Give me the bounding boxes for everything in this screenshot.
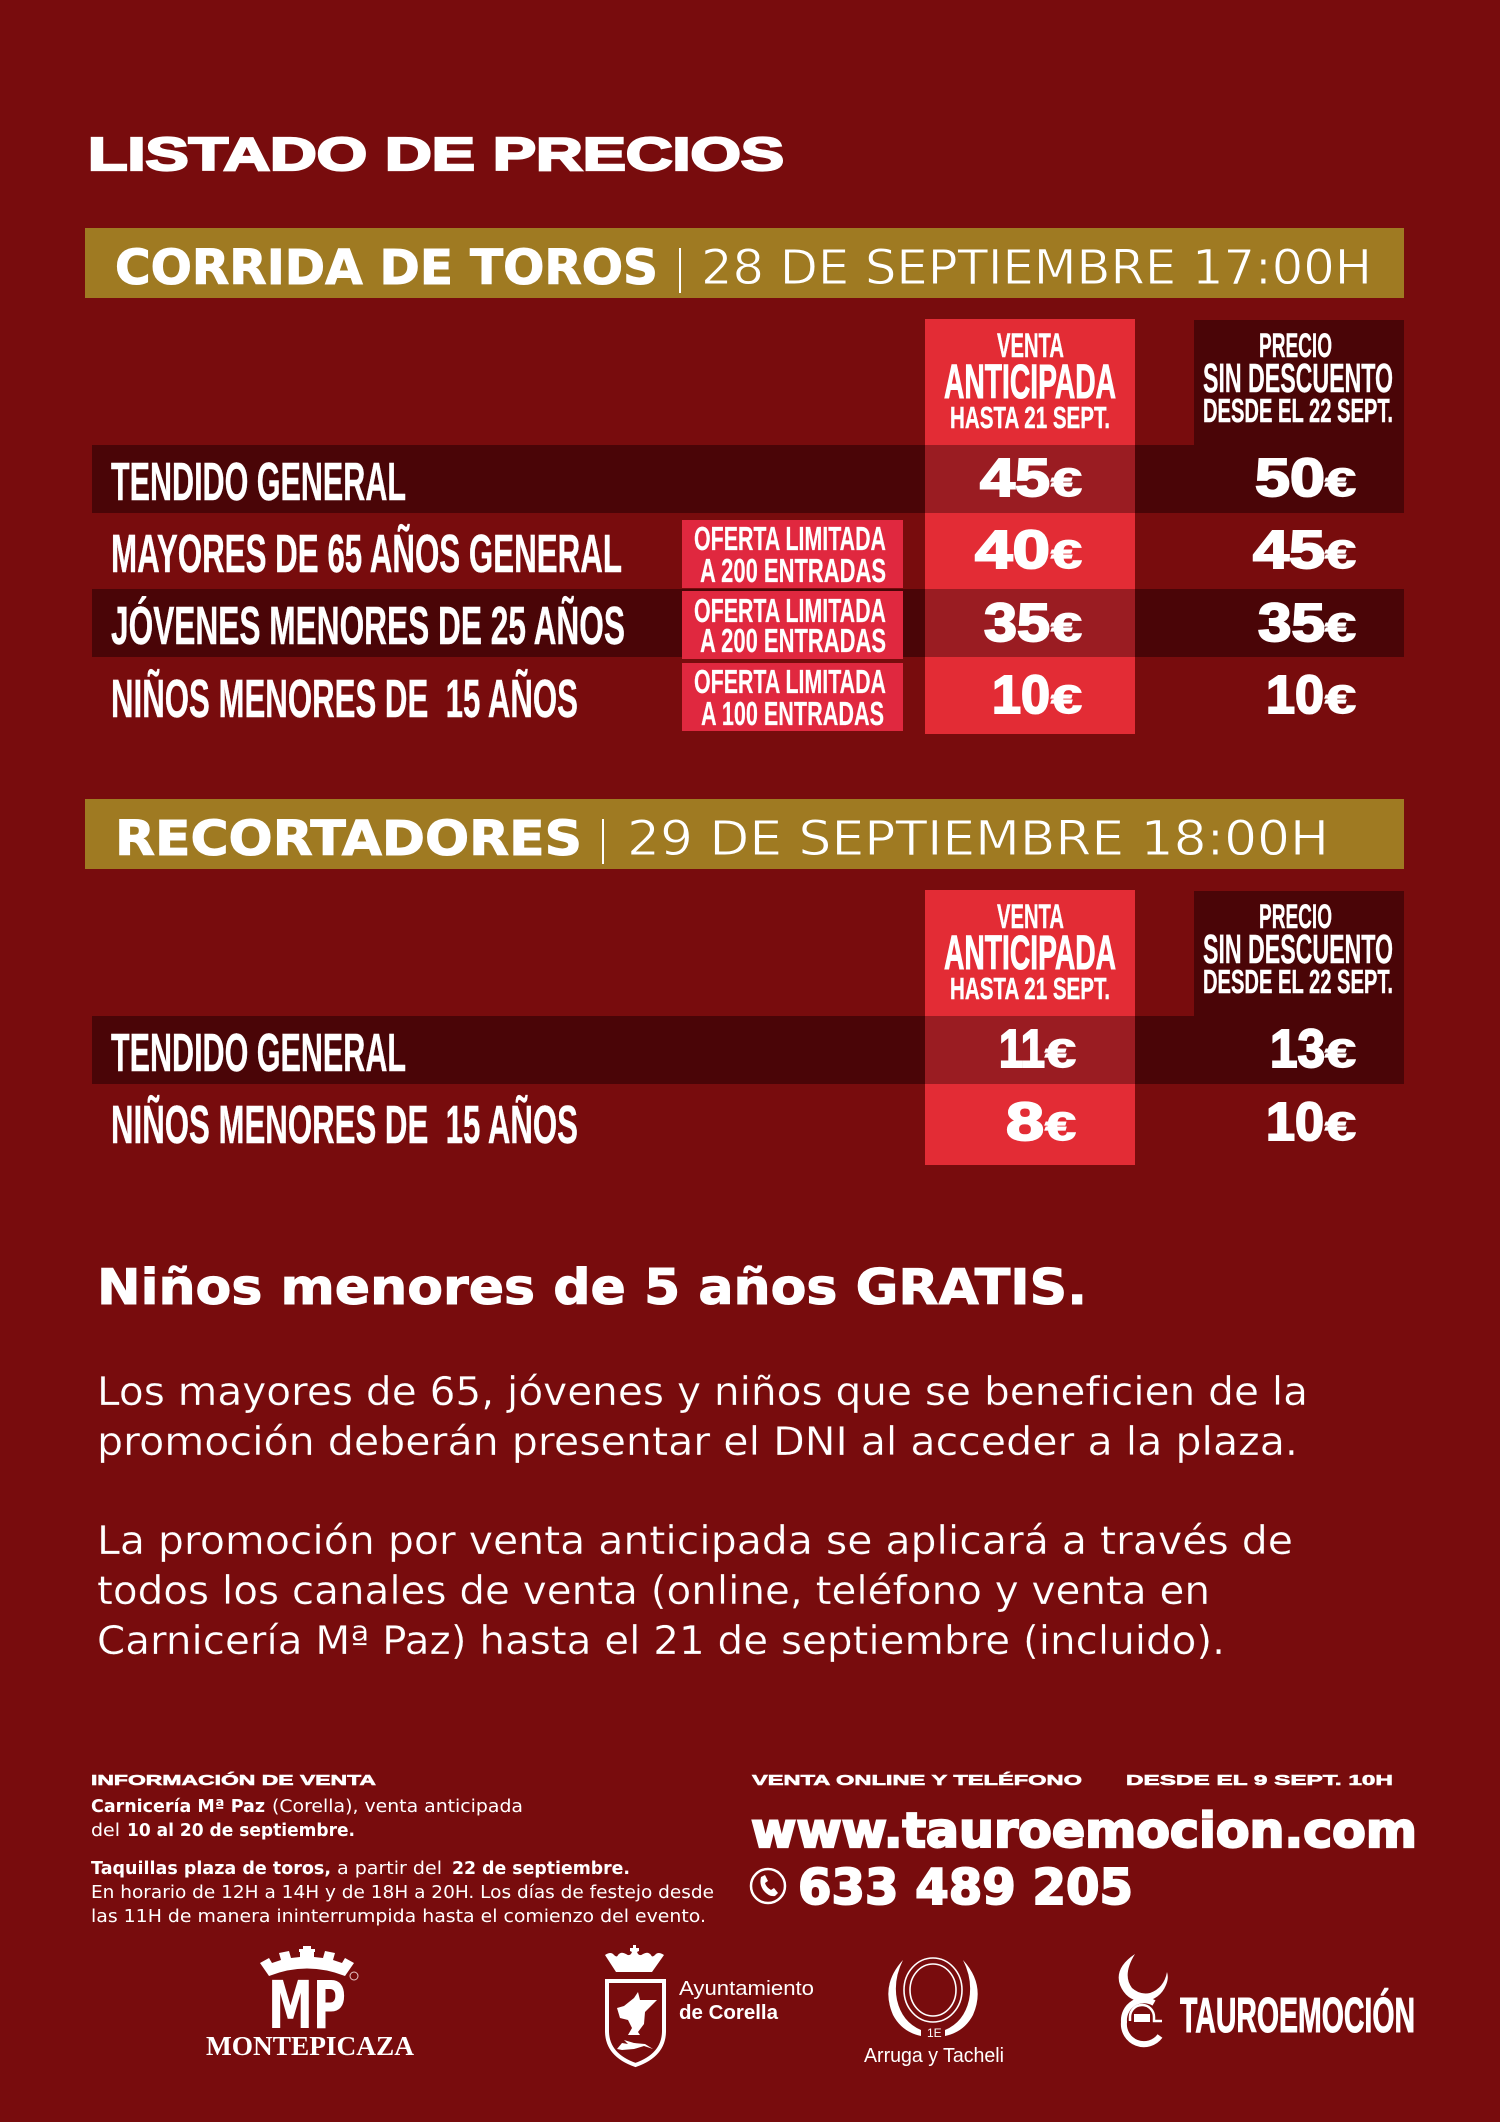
text block: online and phone sales: 633 489 205 — [798, 1859, 1133, 1916]
row: tendido general: € — [1325, 1032, 1356, 1076]
row: tendido general: 11 — [999, 1019, 1045, 1079]
row: jovenes menores de 25 — [111, 591, 1356, 659]
heading bar: recortadores: RECORTADORES — [115, 811, 582, 867]
text block: sales information: 10 al 20 de septiembre. — [127, 1820, 355, 1841]
row: tendido general: € — [1045, 1032, 1076, 1076]
row: mayores de 65: 45 — [1253, 520, 1325, 580]
column backgrounds and row stripes — [92, 319, 1404, 734]
heading bar: corrida: CORRIDA DE TOROS — [115, 240, 658, 296]
text block: DNI note: Los mayores de 65, jóvenes y niños que se beneficien de la — [97, 1370, 1308, 1415]
logo: Arruga y Tacheli: Arruga y Tacheli — [864, 2045, 1004, 2067]
heading bar: recortadores: 29 DE SEPTIEMBRE 18:00H — [627, 811, 1329, 867]
row: tendido general: TENDIDO GENERAL — [111, 452, 406, 512]
row: jovenes menores de 25: € — [1051, 606, 1082, 650]
row: ninos menores de 15: € — [1325, 1105, 1356, 1149]
panel: corrida de toros — [85, 228, 1404, 734]
text block: sales information: En horario de 12H a 14H y de 18H a 20H. Los días de festejo desde — [91, 1882, 714, 1903]
text block: advance sale note: La promoción por venta anticipada se aplicará a través de — [97, 1519, 1293, 1564]
logo: Ayuntamiento de Corella: de Corella — [679, 2002, 779, 2024]
logo: Montepicaza — [206, 1946, 414, 2061]
column header: venta anticipada — [944, 898, 1116, 1006]
row: ninos menores de 15: 10 — [1266, 665, 1324, 725]
logo: Arruga y Tacheli — [864, 1958, 1004, 2067]
text block: sales information: las 11H de manera ininterrumpida hasta el comienzo del evento. — [91, 1906, 706, 1927]
row: ninos menores de 15: € — [1045, 1105, 1076, 1149]
text block: sales information: 22 de septiembre. — [452, 1858, 630, 1879]
row: mayores de 65: € — [1325, 533, 1356, 577]
column header: precio sin descuento: PRECIO — [1259, 898, 1332, 936]
badge: oferta limitada 200: A 200 ENTRADAS — [700, 622, 886, 659]
logo: Montepicaza: MP — [268, 1967, 346, 2044]
heading bar: corrida — [85, 228, 1404, 298]
column header: venta anticipada: VENTA — [997, 327, 1064, 365]
text block: DNI note — [97, 1370, 1308, 1465]
free admission heading: Niños menores de 5 años GRATIS. — [97, 1259, 1087, 1316]
badge: oferta limitada 100 — [682, 663, 903, 732]
row: tendido general: TENDIDO GENERAL — [111, 1023, 406, 1083]
column header: venta anticipada: ANTICIPADA — [944, 927, 1116, 980]
badge: oferta limitada 200: OFERTA LIMITADA — [694, 592, 886, 629]
text block: DNI note: promoción deberán presentar el DNI al acceder a la plaza. — [97, 1420, 1298, 1465]
icon: phone — [751, 1869, 785, 1903]
row: ninos menores de 15: € — [1051, 678, 1082, 722]
logo: Montepicaza: MONTEPICAZA — [206, 2031, 414, 2061]
badge: oferta limitada 200 — [682, 591, 903, 659]
text block: advance sale note — [97, 1519, 1293, 1664]
column header: precio sin descuento — [1203, 898, 1393, 1000]
row: ninos menores de 15: 10 — [1266, 1092, 1324, 1152]
row: ninos menores de 15: NIÑOS MENORES DE 15 AÑOS — [111, 1095, 578, 1155]
logo: Arruga y Tacheli: 1E — [927, 2026, 942, 2040]
text block: online and phone sales — [751, 1772, 1417, 1916]
badge: oferta limitada 100: A 100 ENTRADAS — [701, 695, 884, 732]
row: mayores de 65: 40 — [975, 520, 1050, 580]
text block: online and phone sales: VENTA ONLINE Y TELÉFONO — [752, 1772, 1083, 1789]
text block: sales information: (Corella), venta anticipada — [272, 1796, 523, 1817]
row: ninos menores de 15: NIÑOS MENORES DE 15 AÑOS — [111, 669, 578, 729]
column backgrounds and row stripe — [92, 890, 1404, 1165]
row: tendido general — [111, 1019, 1356, 1083]
text block: sales information: a partir del — [337, 1858, 442, 1879]
row: jovenes menores de 25: € — [1325, 606, 1356, 650]
column header: venta anticipada: HASTA 21 SEPT. — [950, 971, 1110, 1006]
text block: sales information — [91, 1771, 714, 1927]
heading bar: recortadores — [85, 799, 1404, 869]
text block: advance sale note: todos los canales de venta (online, teléfono y venta en — [97, 1569, 1210, 1614]
row: ninos menores de 15 — [111, 663, 1356, 732]
row: ninos menores de 15: 8 — [1006, 1092, 1044, 1152]
badge: oferta limitada 200: A 200 ENTRADAS — [700, 552, 886, 589]
column header: venta anticipada: HASTA 21 SEPT. — [950, 400, 1110, 435]
row: tendido general: € — [1051, 461, 1082, 505]
text block: online and phone sales: www.tauroemocion.com — [751, 1803, 1417, 1859]
heading bar: corrida: 28 DE SEPTIEMBRE 17:00H — [701, 240, 1372, 296]
text block: advance sale note: Carnicería Mª Paz) hasta el 21 de septiembre (incluido). — [97, 1619, 1225, 1664]
badge: oferta limitada 200 — [682, 520, 903, 589]
row: ninos menores de 15: € — [1325, 678, 1356, 722]
text block: sales information: INFORMACIÓN DE VENTA — [91, 1771, 376, 1789]
row: mayores de 65 — [111, 520, 1356, 589]
column header: precio sin descuento — [1203, 327, 1393, 429]
row: tendido general — [111, 448, 1356, 512]
column header: venta anticipada — [944, 327, 1116, 435]
text block: sales information: del — [91, 1820, 120, 1841]
text block: online and phone sales: DESDE EL 9 SEPT. 10H — [1126, 1772, 1393, 1789]
panel: recortadores — [85, 799, 1404, 1165]
title: LISTADO DE PRECIOS — [88, 128, 784, 180]
column header: venta anticipada: ANTICIPADA — [944, 356, 1116, 409]
logo: Tauroemoción — [1119, 1954, 1415, 2044]
badge: oferta limitada 200: OFERTA LIMITADA — [694, 520, 886, 557]
row: jovenes menores de 25: JÓVENES MENORES DE 25 AÑOS — [111, 596, 625, 656]
text block: sales information: Carnicería Mª Paz — [91, 1796, 265, 1817]
row: jovenes menores de 25: 35 — [1258, 593, 1325, 653]
badge: oferta limitada 100: OFERTA LIMITADA — [694, 663, 886, 700]
column header: venta anticipada: VENTA — [997, 898, 1064, 936]
text block: sales information: Taquillas plaza de toros, — [91, 1858, 331, 1879]
logo: Ayuntamiento de Corella: Ayuntamiento — [679, 1978, 814, 2000]
row: tendido general: 50 — [1255, 448, 1325, 508]
row: jovenes menores de 25: 35 — [984, 593, 1050, 653]
row: mayores de 65: MAYORES DE 65 AÑOS GENERAL — [111, 524, 622, 584]
column header: precio sin descuento: PRECIO — [1259, 327, 1332, 365]
row: ninos menores de 15: 10 — [992, 665, 1050, 725]
row: ninos menores de 15 — [111, 1092, 1356, 1155]
row: tendido general: € — [1325, 461, 1356, 505]
row: tendido general: 45 — [980, 448, 1050, 508]
row: tendido general: 13 — [1270, 1019, 1325, 1079]
row: mayores de 65: € — [1051, 533, 1082, 577]
logo: Ayuntamiento de Corella — [605, 1945, 814, 2065]
